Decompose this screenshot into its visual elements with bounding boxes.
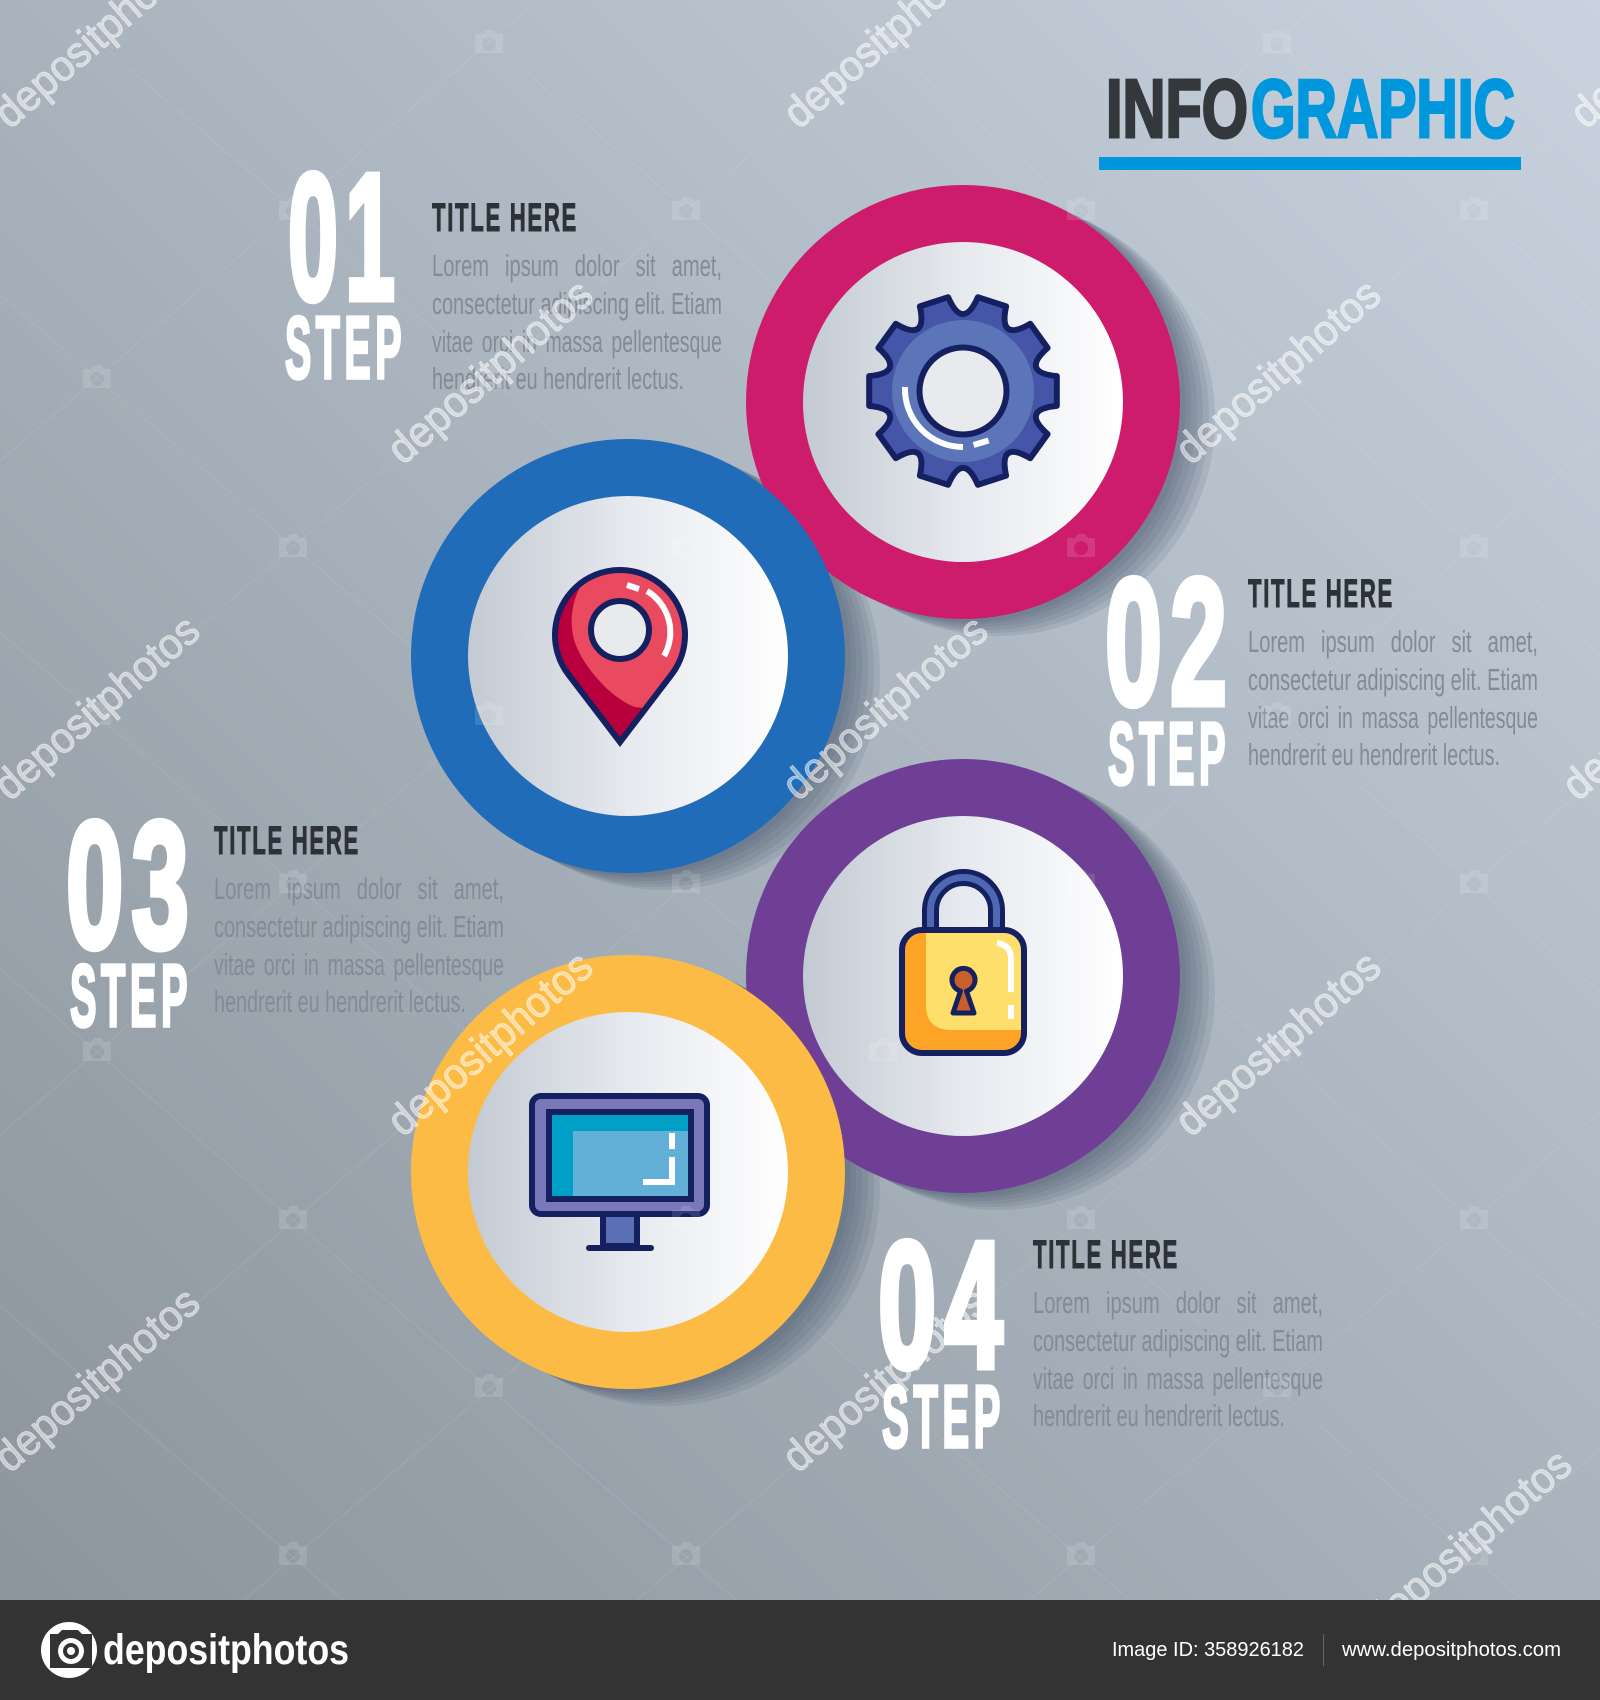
step 04: consectetur adipiscing elit. Etiam	[1033, 1323, 1323, 1358]
step 02: STEP	[1108, 704, 1230, 803]
step 03: STEP	[70, 946, 192, 1045]
icon: location pin	[555, 570, 685, 742]
circle shadows	[417, 188, 1215, 1406]
step 04	[878, 1205, 1323, 1466]
step 03: Lorem ipsum dolor sit amet,	[214, 871, 504, 906]
step 01: vitae orci in massa pellentesque	[432, 324, 722, 359]
image id: Image ID: 358926182	[1112, 1639, 1304, 1661]
title: INFO	[1106, 62, 1248, 155]
step 01: consectetur adipiscing elit. Etiam	[432, 286, 722, 321]
step 04: 04	[878, 1205, 1011, 1406]
icon: gear	[869, 297, 1057, 485]
icon: padlock	[902, 878, 1024, 1053]
step 02: TITLE HERE	[1248, 572, 1394, 616]
icon: depositphotos logo	[41, 1622, 97, 1678]
step 03	[66, 785, 504, 1045]
watermarks: depositphotos	[1166, 942, 1390, 1146]
step 04: STEP	[882, 1367, 1005, 1466]
icon: monitor	[532, 1096, 707, 1248]
step 03: consectetur adipiscing elit. Etiam	[214, 909, 504, 944]
step 01: STEP	[285, 298, 406, 397]
panel: monitor circle	[411, 955, 845, 1389]
step 02	[1105, 542, 1538, 803]
step 01: hendrerit eu hendrerit lectus.	[432, 361, 684, 396]
watermarks: depositphotos	[1357, 1440, 1581, 1644]
step 04: vitae orci in massa pellentesque	[1033, 1361, 1323, 1396]
step 04: Lorem ipsum dolor sit amet,	[1033, 1285, 1323, 1320]
brand name: depositphotos	[103, 1626, 349, 1674]
panel: lock circle	[746, 759, 1180, 1193]
step 01: TITLE HERE	[432, 196, 578, 240]
title underline	[1099, 157, 1521, 170]
title	[1106, 62, 1515, 155]
step 01: Lorem ipsum dolor sit amet,	[432, 248, 722, 283]
watermarks: depositphotos	[378, 270, 602, 474]
watermarks: depositphotos	[773, 1278, 997, 1482]
website: www.depositphotos.com	[1341, 1639, 1561, 1661]
step 03: 03	[66, 785, 197, 986]
step 02: 02	[1105, 542, 1235, 743]
watermarks: depositphotos	[773, 606, 997, 810]
panel: pin circle	[411, 439, 845, 873]
step 04: hendrerit eu hendrerit lectus.	[1033, 1398, 1285, 1433]
step 04: TITLE HERE	[1033, 1233, 1179, 1277]
panel: gear circle	[746, 185, 1180, 619]
step 03: vitae orci in massa pellentesque	[214, 947, 504, 982]
watermark camera marks	[83, 30, 1488, 1565]
step 03: hendrerit eu hendrerit lectus.	[214, 984, 466, 1019]
watermarks: depositphotos	[378, 942, 602, 1146]
step 03: TITLE HERE	[214, 819, 360, 863]
watermarks: depositphotos	[1166, 270, 1390, 474]
step 01: 01	[288, 137, 402, 338]
footer bar	[0, 1600, 1600, 1700]
step 01	[285, 137, 722, 397]
